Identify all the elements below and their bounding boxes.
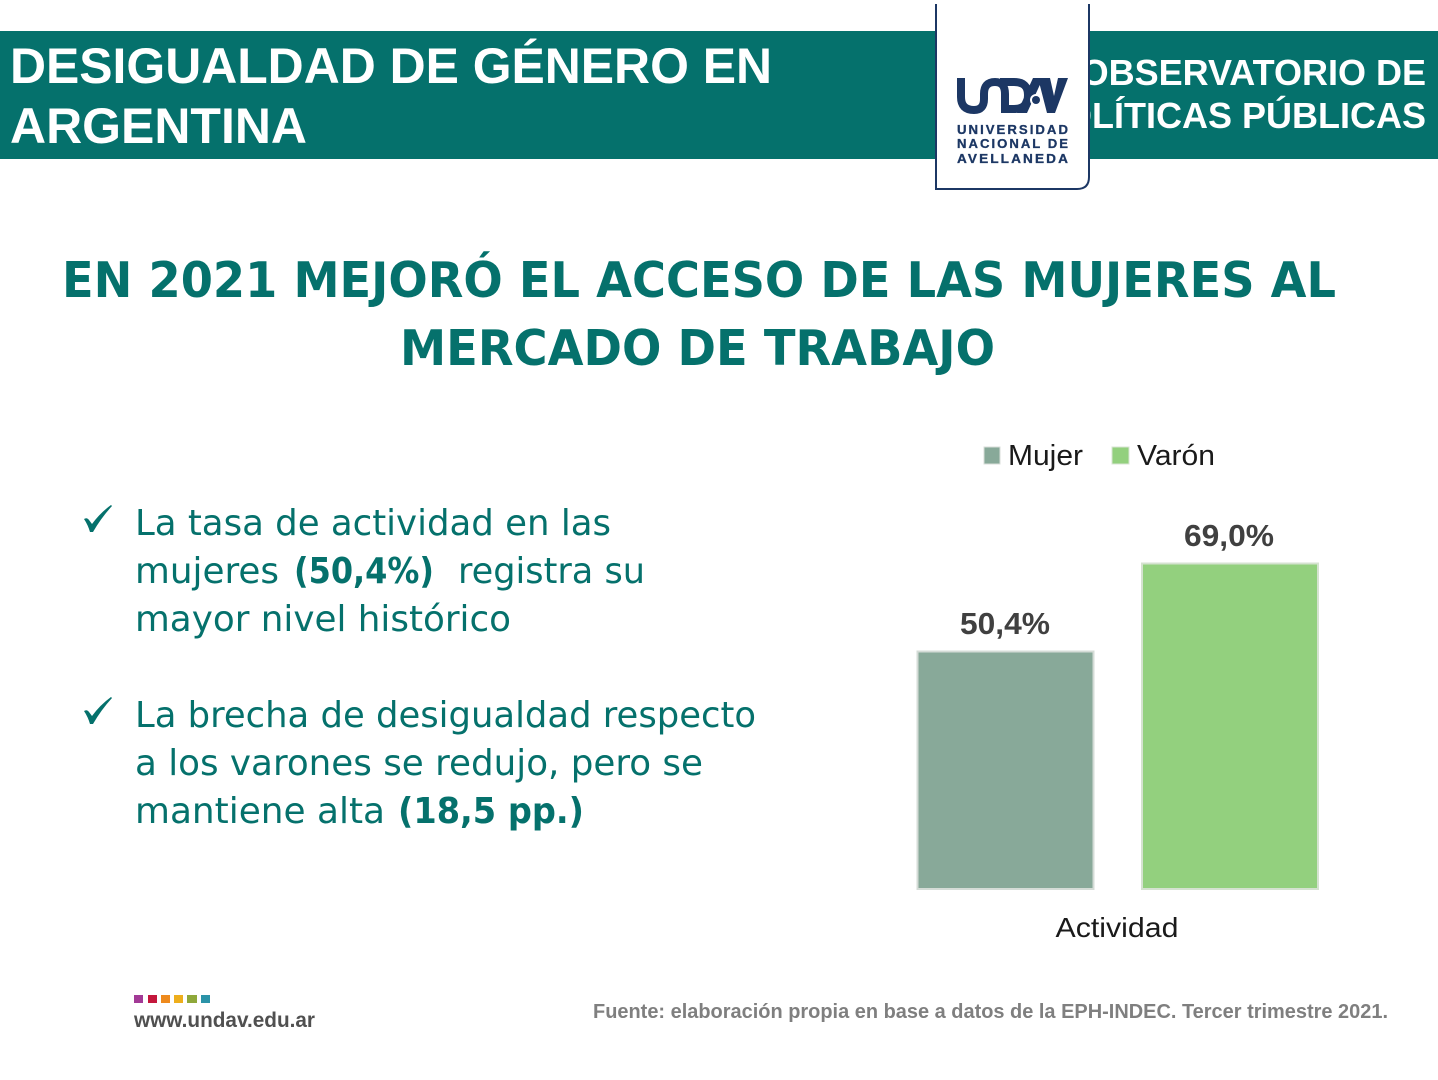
axis label: Actividad [1056, 912, 1178, 943]
logo text [957, 122, 1070, 166]
source note: Fuente: elaboración propia en base a datos de la EPH-INDEC. Tercer trimestre 2021. [593, 1001, 1388, 1023]
legend: Varón [1137, 440, 1215, 472]
bar: Varón 69,0% [1142, 518, 1318, 889]
logo card: UNDAV [936, 4, 1089, 189]
main heading: MERCADO DE TRABAJO [400, 320, 995, 377]
bullet 2 text: mantiene alta [135, 791, 385, 832]
header right label [1040, 52, 1426, 136]
bar: Varón 69,0%: 69,0% [1184, 518, 1274, 553]
bullet 1 text: mayor nivel histórico [135, 599, 511, 640]
bar chart [918, 440, 1318, 943]
website: www.undav.edu.ar [133, 1009, 315, 1032]
bullet 1 [84, 503, 645, 640]
bullet 2 [84, 695, 756, 832]
bar: Mujer 50,4%: 50,4% [960, 606, 1050, 641]
main heading [62, 250, 1336, 377]
header right label: POLÍTICAS PÚBLICAS [1040, 94, 1426, 136]
main heading: EN 2021 MEJORÓ EL ACCESO DE LAS MUJERES AL [62, 250, 1336, 309]
bullet 2 text: a los varones se redujo, pero se [135, 743, 703, 784]
bullet 2 text [135, 695, 756, 832]
header title: ARGENTINA [10, 98, 307, 154]
bullet 2 text: (18,5 pp.) [398, 791, 584, 832]
header title: DESIGUALDAD DE GÉNERO EN [10, 38, 772, 94]
header band [0, 31, 1438, 159]
bullet 1 text [135, 503, 645, 640]
legend: Mujer [1008, 440, 1083, 472]
legend [984, 440, 1215, 472]
bullet 1 text: registra su [458, 551, 645, 592]
logo text: AVELLANEDA [957, 151, 1070, 166]
footer brand [133, 995, 315, 1032]
colour squares [134, 995, 210, 1003]
bullet 1 text: mujeres [135, 551, 279, 592]
logo mark [961, 78, 1068, 113]
bullet 1 text: La tasa de actividad en las [135, 503, 611, 544]
bar: Mujer 50,4% [918, 606, 1094, 889]
logo text: NACIONAL DE [957, 136, 1070, 151]
logo text: UNIVERSIDAD [957, 122, 1070, 137]
header right label: OBSERVATORIO DE [1081, 52, 1426, 93]
bullet 1 text: (50,4%) [294, 551, 434, 592]
header title [10, 38, 772, 154]
icon: check mark 2 [84, 697, 112, 724]
bullet 2 text: La brecha de desigualdad respecto [135, 695, 756, 736]
icon: check mark 1 [84, 505, 112, 532]
